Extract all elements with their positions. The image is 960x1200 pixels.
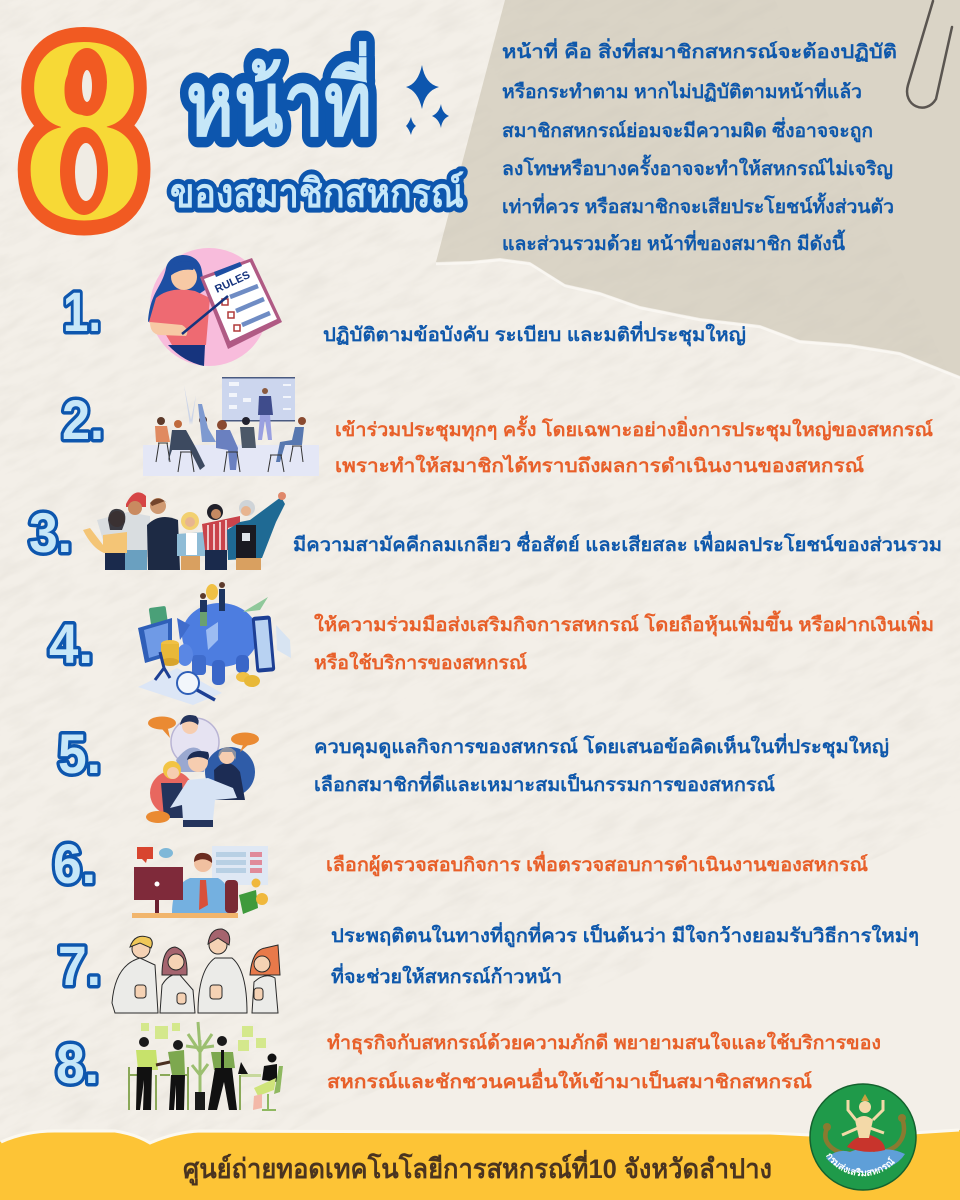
- intro text: หน้าที่ คือ สิ่งที่สมาชิกสหกรณ์จะต้องปฏิบัติ: [502, 38, 897, 63]
- number 2: 2.: [62, 388, 104, 451]
- item 1 text: ปฏิบัติตามข้อบังคับ ระเบียบ และมติที่ประชุมใหญ่: [323, 321, 746, 347]
- item 7 text: [331, 922, 919, 988]
- intro text: ลงโทษหรือบางครั้งอาจจะทำให้สหกรณ์ไม่เจริญ: [502, 154, 893, 180]
- icon: piggy bank finance: [138, 582, 291, 705]
- icon: group of friends: [83, 492, 286, 570]
- item 7 text: ประพฤติตนในทางที่ถูกที่ควร เป็นต้นว่า มีใจกว้างยอมรับวิธีการใหม่ๆ: [331, 922, 919, 948]
- intro text: สมาชิกสหกรณ์ย่อมจะมีความผิด ซึ่งอาจจะถูก: [502, 117, 873, 143]
- icon: four people thumbs up: [112, 929, 280, 1013]
- torn paper edge highlight: [436, 260, 960, 378]
- icon: woman with rules clipboard: RULES: [213, 269, 252, 296]
- item 3 text: มีความสามัคคีกลมเกลียว ซื่อสัตย์ และเสียสละ เพื่อผลประโยชน์ของส่วนรวม: [293, 531, 942, 556]
- number 1: 1.: [63, 280, 101, 343]
- intro text: หรือกระทำตาม หากไม่ปฏิบัติตามหน้าที่แล้ว: [502, 78, 862, 103]
- item 8 text: ทำธุรกิจกับสหกรณ์ด้วยความภักดี พยายามสนใจและใช้บริการของ: [327, 1031, 881, 1055]
- item 5 text: เลือกสมาชิกที่ดีและเหมาะสมเป็นกรรมการของสหกรณ์: [314, 771, 775, 796]
- icon: business handshake with plant: [129, 1022, 283, 1110]
- number 5: 5.: [58, 722, 101, 785]
- number 6: 6.: [53, 832, 96, 895]
- subtitle: ของสมาชิกสหกรณ์: ของสมาชิกสหกรณ์: [170, 171, 464, 216]
- item 6 text: เลือกผู้ตรวจสอบกิจการ เพื่อตรวจสอบการดำเนินงานของสหกรณ์: [326, 851, 868, 877]
- torn paper panel: [436, 0, 960, 376]
- icon: woman with rules clipboard: [148, 248, 282, 366]
- item 2 text: [335, 415, 933, 477]
- item 7 text: ที่จะช่วยให้สหกรณ์ก้าวหน้า: [331, 963, 562, 988]
- item 4 text: หรือใช้บริการของสหกรณ์: [314, 651, 527, 674]
- item 8 text: สหกรณ์และชักชวนคนอื่นให้เข้ามาเป็นสมาชิกสหกรณ์: [327, 1068, 812, 1093]
- title: หน้าที่: หน้าที่: [186, 41, 372, 155]
- intro text: เท่าที่ควร หรือสมาชิกจะเสียประโยชน์ทั้งส่วนตัว: [502, 192, 894, 218]
- number 3: 3.: [29, 501, 72, 564]
- intro text: [502, 38, 897, 255]
- item 2 text: เพราะทำให้สมาชิกได้ทราบถึงผลการดำเนินงานของสหกรณ์: [335, 454, 864, 477]
- icon: meeting with presenter: [143, 377, 319, 476]
- footer band: [0, 1130, 960, 1200]
- number 7: 7.: [58, 934, 101, 997]
- footer text: ศูนย์ถ่ายทอดเทคโนโลยีการสหกรณ์ที่10 จังหวัดลำปาง: [183, 1149, 772, 1186]
- number 4: 4.: [49, 612, 93, 675]
- item 2 text: เข้าร่วมประชุมทุกๆ ครั้ง โดยเฉพาะอย่างยิ่งการประชุมใหญ่ของสหกรณ์: [335, 415, 933, 442]
- item 5 text: [314, 733, 889, 796]
- number 8: 8.: [56, 1032, 99, 1095]
- item 5 text: ควบคุมดูแลกิจการของสหกรณ์ โดยเสนอข้อคิดเห็นในที่ประชุมใหญ่: [314, 733, 889, 759]
- intro text: และส่วนรวมด้วย หน้าที่ของสมาชิก มีดังนี้: [502, 229, 846, 255]
- logo: cooperative promotion department seal: [809, 1083, 917, 1191]
- icon: sparkles: [406, 65, 449, 135]
- logo: cooperative promotion department seal: กรมส่งเสริมสหกรณ์: [826, 1154, 895, 1176]
- icon: auditor at computer: [132, 846, 268, 918]
- item 4 text: [314, 610, 934, 674]
- item 8 text: [327, 1031, 881, 1093]
- paper clip: [907, 1, 952, 108]
- item 4 text: ให้ความร่วมมือส่งเสริมกิจการสหกรณ์ โดยถือหุ้นเพิ่มขึ้น หรือฝากเงินเพิ่ม: [314, 610, 934, 637]
- icon: people discussing: [146, 715, 259, 827]
